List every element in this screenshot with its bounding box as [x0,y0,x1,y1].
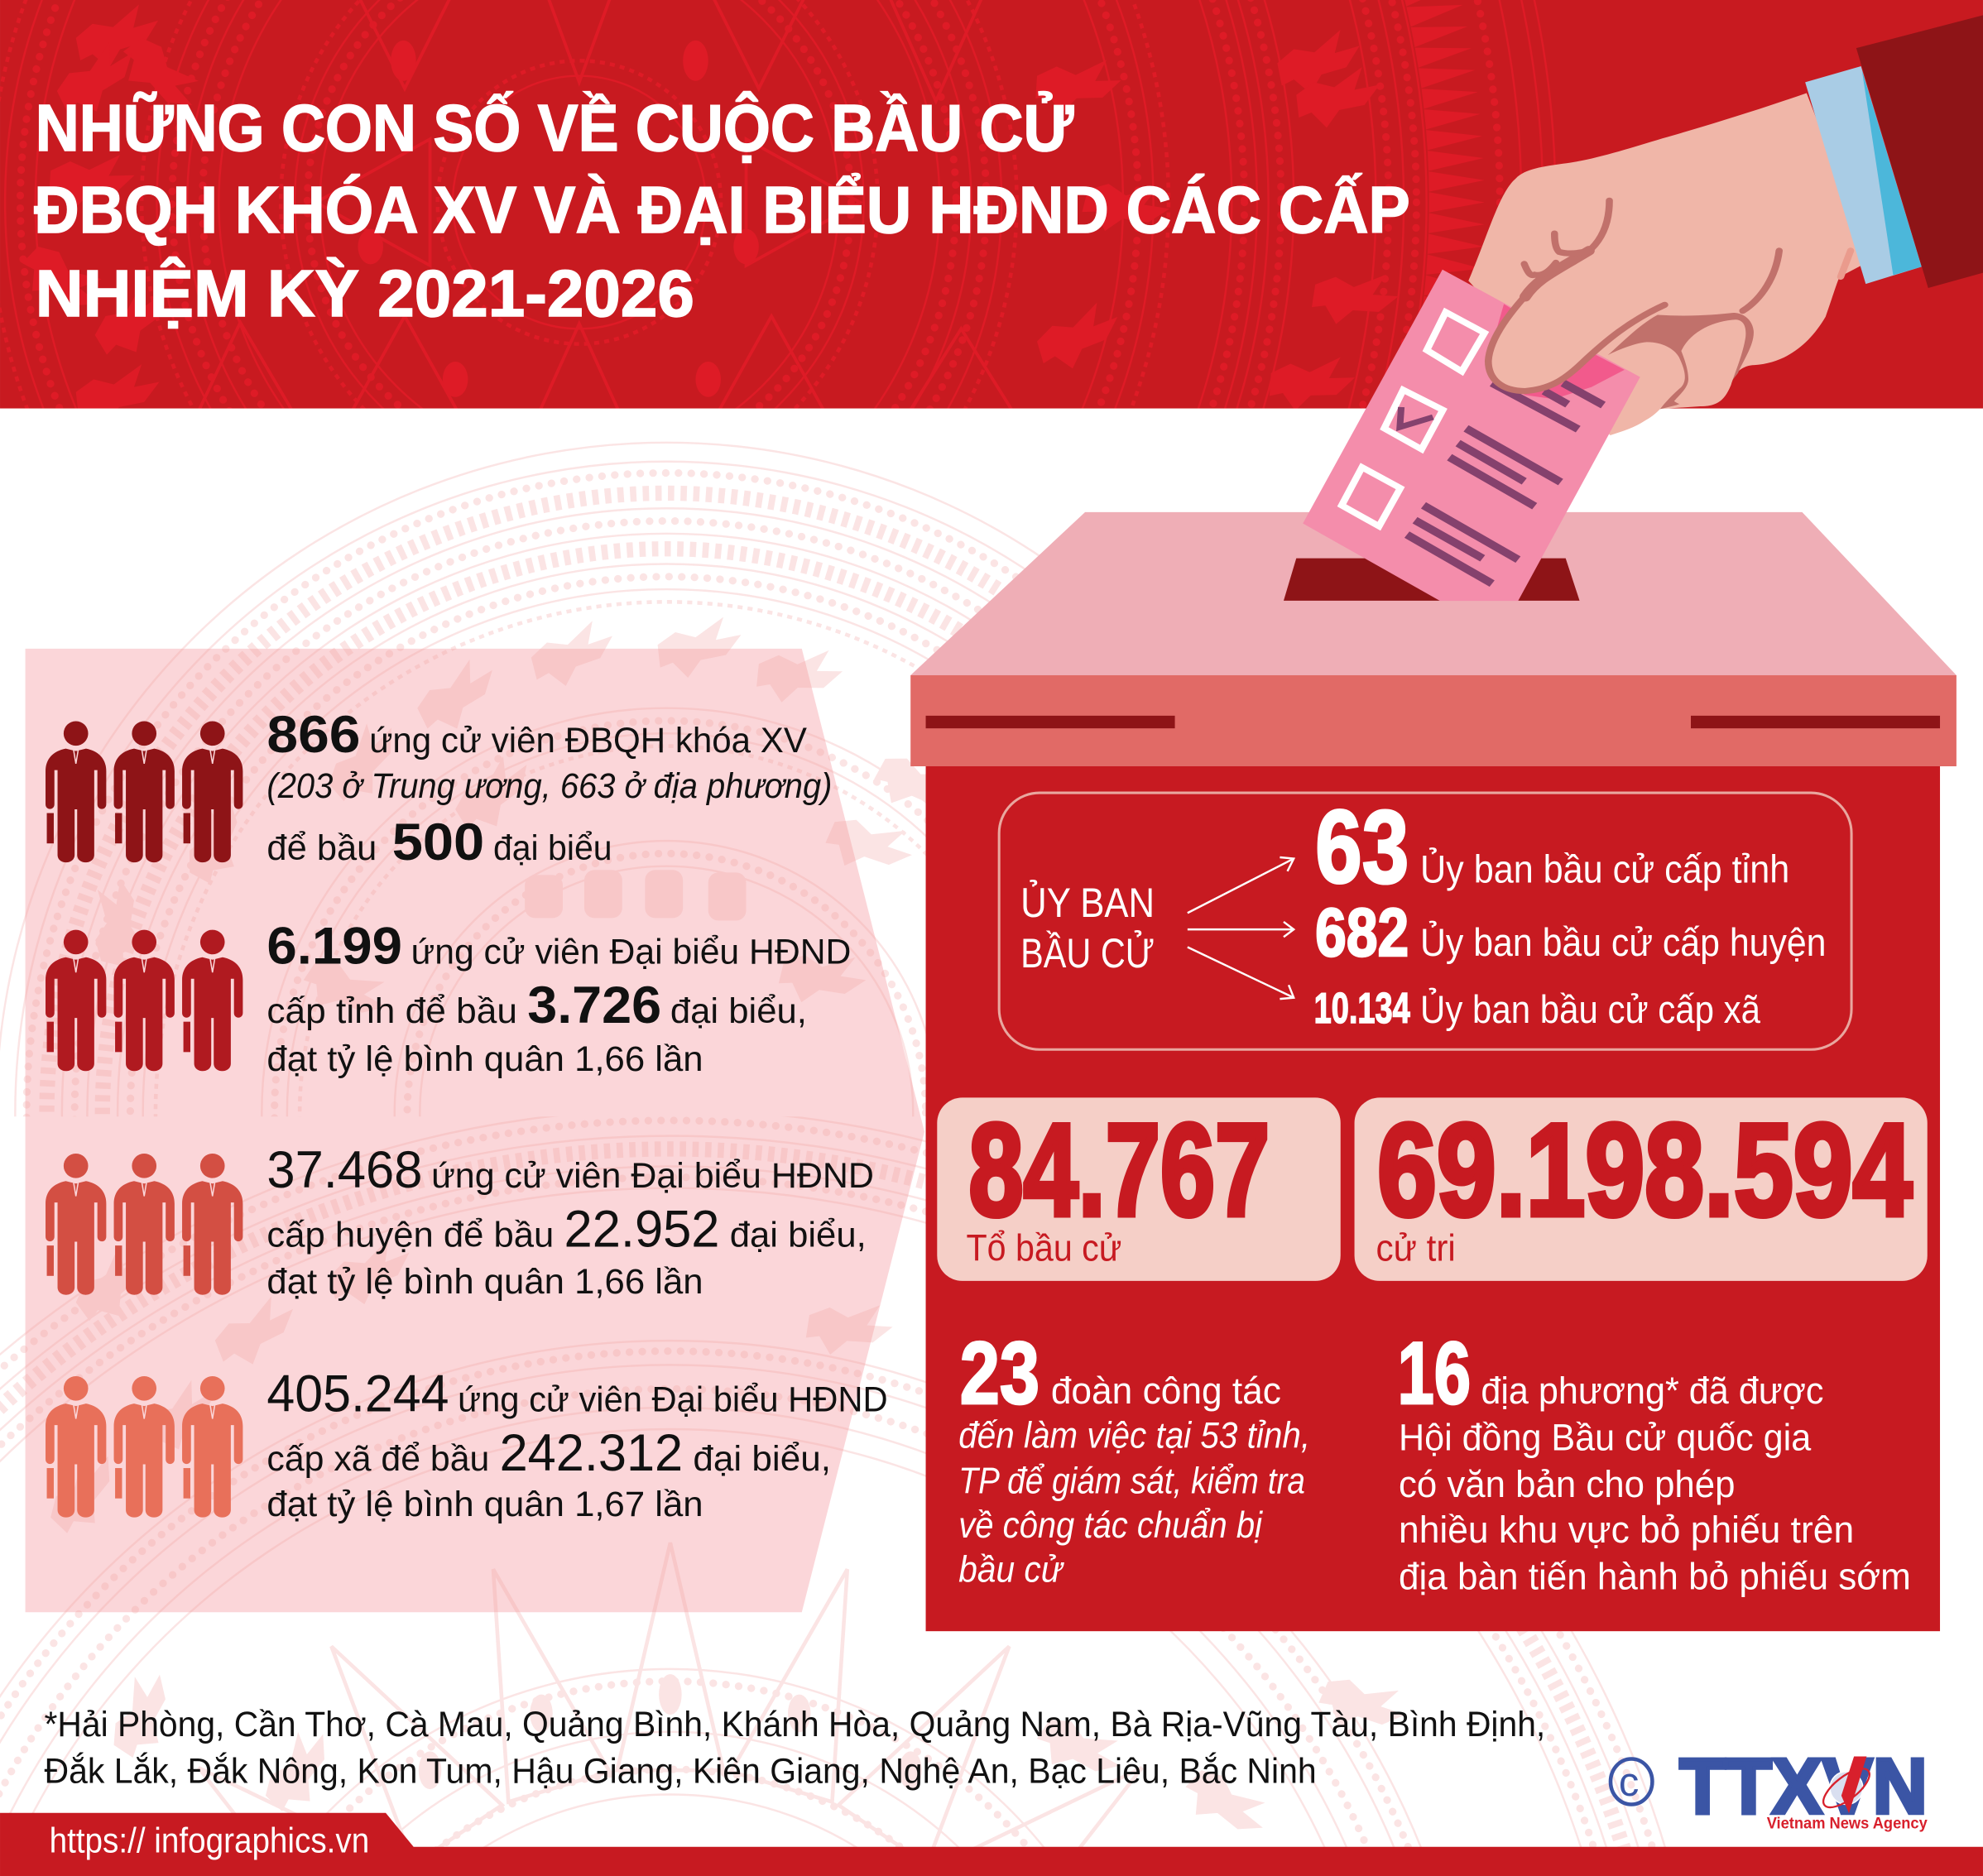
text: 866 candidates: (203 ở Trung ương, 663 ở địa phương) [266,766,832,806]
row: commune candidates [46,1365,888,1524]
text: 866 candidates: đại biểu [493,828,612,868]
row: provincial candidates [46,917,851,1079]
footer bar [0,1813,1983,1876]
text: 6.199 candidates: đạt tỷ lệ bình quân 1,66 lần [266,1039,703,1079]
text: 37.468 candidates [266,1141,874,1302]
text: 37.468 candidates: 37.468 [266,1141,422,1199]
text: 6.199 candidates: 3.726 [527,976,661,1034]
footer url: https:// infographics.vn [50,1821,369,1861]
title: NHỮNG CON SỐ VỀ CUỘC BẦU CỬ [36,91,1073,165]
row: National Assembly candidates [46,706,832,871]
footnote: Đắk Lắk, Đắk Nông, Kon Tum, Hậu Giang, Kiên Giang, Nghệ An, Bạc Liêu, Bắc Ninh [44,1752,1317,1792]
count: district committees: Ủy ban bầu cử cấp huyện [1420,919,1827,965]
icon: three people dark [46,721,242,862]
text: 37.468 candidates: 22.952 [564,1201,719,1259]
text: committee label: ỦY BAN [1020,879,1155,926]
count: commune committees: 10.134 [1314,985,1410,1033]
middle finger [1674,319,1745,406]
jacket sleeve [1856,15,1983,288]
text: 16 localities: nhiều khu vực bỏ phiếu trên [1399,1509,1854,1551]
footnote [44,1705,1545,1792]
text: 6.199 candidates: cấp tỉnh để bầu [266,991,517,1031]
text: 405.244 candidates: đạt tỷ lệ bình quân 1,67 lần [266,1485,703,1524]
palm and wrist [1468,93,1870,435]
text: 866 candidates [266,706,832,871]
text: 37.468 candidates: đạt tỷ lệ bình quân 1,66 lần [266,1262,703,1302]
text: 37.468 candidates: ứng cử viên Đại biểu HĐND [431,1156,874,1196]
text: 16 localities: 16 [1398,1323,1471,1423]
text: 405.244 candidates [266,1365,888,1524]
box slot [1284,559,1580,601]
text: 23 working delegations: đến làm việc tại 53 tỉnh, [958,1416,1310,1456]
text: 23 working delegations: đoàn công tác [1051,1370,1281,1412]
count: district committees: 682 [1315,895,1409,971]
logo: TTXVN: TTXVN [1679,1743,1928,1830]
count: commune committees [1314,985,1761,1033]
stat card: election teams: 84.767 [968,1096,1270,1243]
text: committee label: BẦU CỬ [1020,929,1155,976]
text: 6.199 candidates: 6.199 [266,917,402,975]
text: 23 working delegations: TP để giám sát, kiểm tra [958,1461,1305,1502]
thumb [1488,249,1664,391]
text: 37.468 candidates: đại biểu, [730,1216,867,1255]
logo: TTXVN: Vietnam News Agency [1767,1816,1928,1833]
stat card: election teams [937,1096,1341,1281]
title: ĐBQH KHÓA XV VÀ ĐẠI BIỂU HĐND CÁC CẤP [34,173,1410,247]
stat card: election teams: Tổ bầu cử [966,1226,1121,1269]
text: 23 working delegations: bầu cử [958,1550,1064,1591]
panel: candidates [25,649,924,1612]
hand holding ballot [1303,15,1983,601]
logo: TTXVN: c [1619,1760,1639,1805]
count: provincial committees [1315,789,1789,905]
text: 866 candidates: ứng cử viên ĐBQH khóa XV [369,721,807,760]
title [34,91,1410,330]
count: provincial committees: 63 [1315,789,1409,905]
text: 405.244 candidates: đại biểu, [693,1439,831,1479]
text: 16 localities: Hội đồng Bầu cử quốc gia [1399,1417,1812,1459]
icon: three people orange red [46,1376,242,1518]
ballot paper [1303,270,1640,601]
election committee box [999,789,1851,1049]
footnote: *Hải Phòng, Cần Thơ, Cà Mau, Quảng Bình, Khánh Hòa, Quảng Nam, Bà Rịa-Vũng Tàu, Bình Định, [44,1705,1545,1744]
panel: ballot box body [926,766,1940,1631]
text: 6.199 candidates: đại biểu, [670,991,807,1031]
row: district candidates [46,1141,874,1302]
text: 405.244 candidates: 242.312 [500,1424,683,1482]
drum pattern: pale background [0,443,1673,1875]
icon: three people red [46,930,242,1071]
icon: three people medium red [46,1154,242,1295]
finger lines [1488,200,1851,391]
shirt cuff [1805,66,1922,284]
text: 866 candidates: 500 [392,813,484,871]
text: 16 localities [1398,1323,1911,1598]
text: 23 working delegations [958,1323,1310,1591]
text: 866 candidates: 866 [266,706,361,764]
text: 23 working delegations: về công tác chuẩn bị [958,1505,1263,1546]
arrows [1188,857,1294,999]
ballot box front band [910,675,1957,766]
ballot box lid [910,512,1957,675]
text: 6.199 candidates: ứng cử viên Đại biểu HĐND [411,932,851,972]
text: 405.244 candidates: ứng cử viên Đại biểu HĐND [458,1379,888,1419]
text: 6.199 candidates [266,917,851,1079]
count: provincial committees: Ủy ban bầu cử cấp tỉnh [1420,847,1789,892]
text: 23 working delegations: 23 [960,1323,1040,1423]
header banner [0,0,1983,409]
text: 16 localities: địa bàn tiến hành bỏ phiếu sớm [1399,1556,1911,1598]
text: 37.468 candidates: cấp huyện để bầu [266,1216,554,1255]
title: NHIỆM KỲ 2021-2026 [36,257,694,330]
count: district committees [1315,895,1827,971]
text: 866 candidates: để bầu [266,828,377,868]
text: 16 localities: địa phương* đã được [1481,1370,1823,1412]
text: 405.244 candidates: cấp xã để bầu [266,1439,489,1479]
text: 16 localities: có văn bản cho phép [1399,1463,1735,1505]
index finger [1572,342,1685,435]
count: commune committees: Ủy ban bầu cử cấp xã [1420,986,1761,1032]
stat card: voters: cử tri [1376,1226,1456,1269]
text: committee label [1020,879,1155,976]
finger shadow [1608,313,1754,409]
text: 405.244 candidates: 405.244 [266,1365,449,1423]
